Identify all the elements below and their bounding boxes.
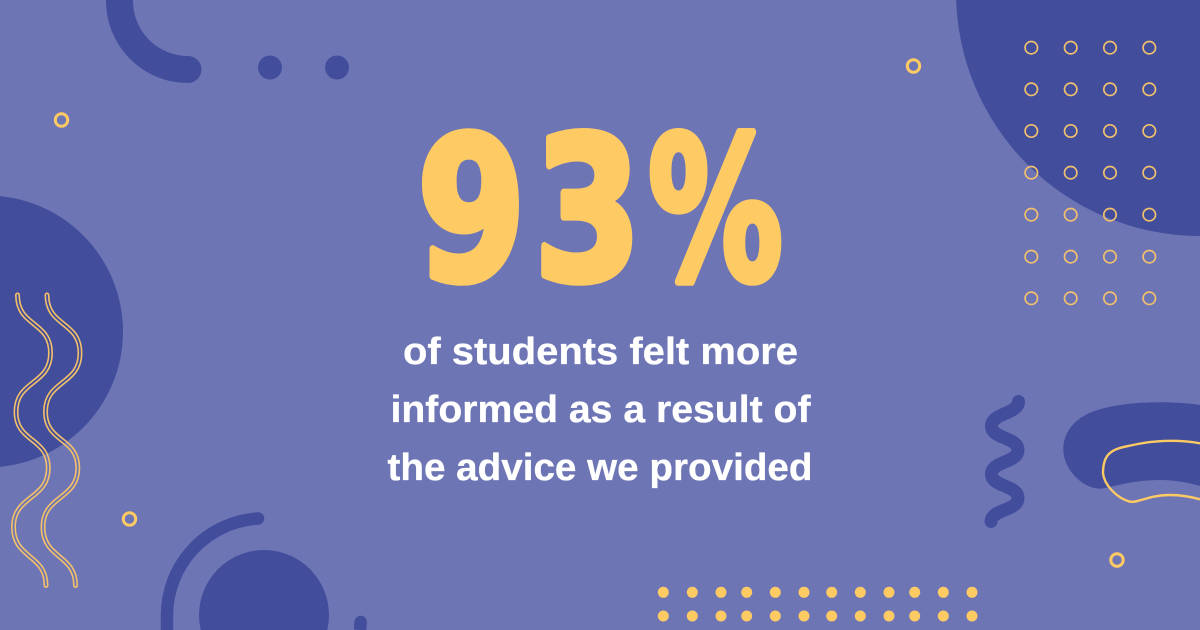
blob outline bbox=[1103, 441, 1200, 502]
ring grid bbox=[1025, 42, 1156, 304]
bottom circle bbox=[199, 550, 329, 630]
top-right circle bbox=[956, 0, 1200, 236]
caption: informed as a result of bbox=[390, 389, 811, 431]
bottom dot grid bbox=[658, 587, 978, 622]
top-left arc bbox=[120, 0, 188, 70]
big statistic: 93%: % bbox=[648, 95, 783, 326]
bottom arc bbox=[167, 512, 264, 630]
squiggle bbox=[991, 402, 1018, 522]
small yellow rings bbox=[55, 60, 1123, 566]
left circle bbox=[0, 196, 123, 468]
big statistic: 93% bbox=[417, 95, 783, 327]
caption: of students felt more bbox=[403, 331, 798, 373]
big statistic: 93%: 9 bbox=[417, 96, 526, 327]
caption: the advice we provided bbox=[388, 447, 812, 489]
wavy lines bbox=[11, 292, 82, 588]
top dots bbox=[258, 56, 349, 80]
blob bbox=[1063, 402, 1200, 489]
caption bbox=[388, 331, 812, 489]
big statistic: 93%: 3 bbox=[534, 95, 641, 326]
bottom stub bbox=[354, 616, 367, 630]
